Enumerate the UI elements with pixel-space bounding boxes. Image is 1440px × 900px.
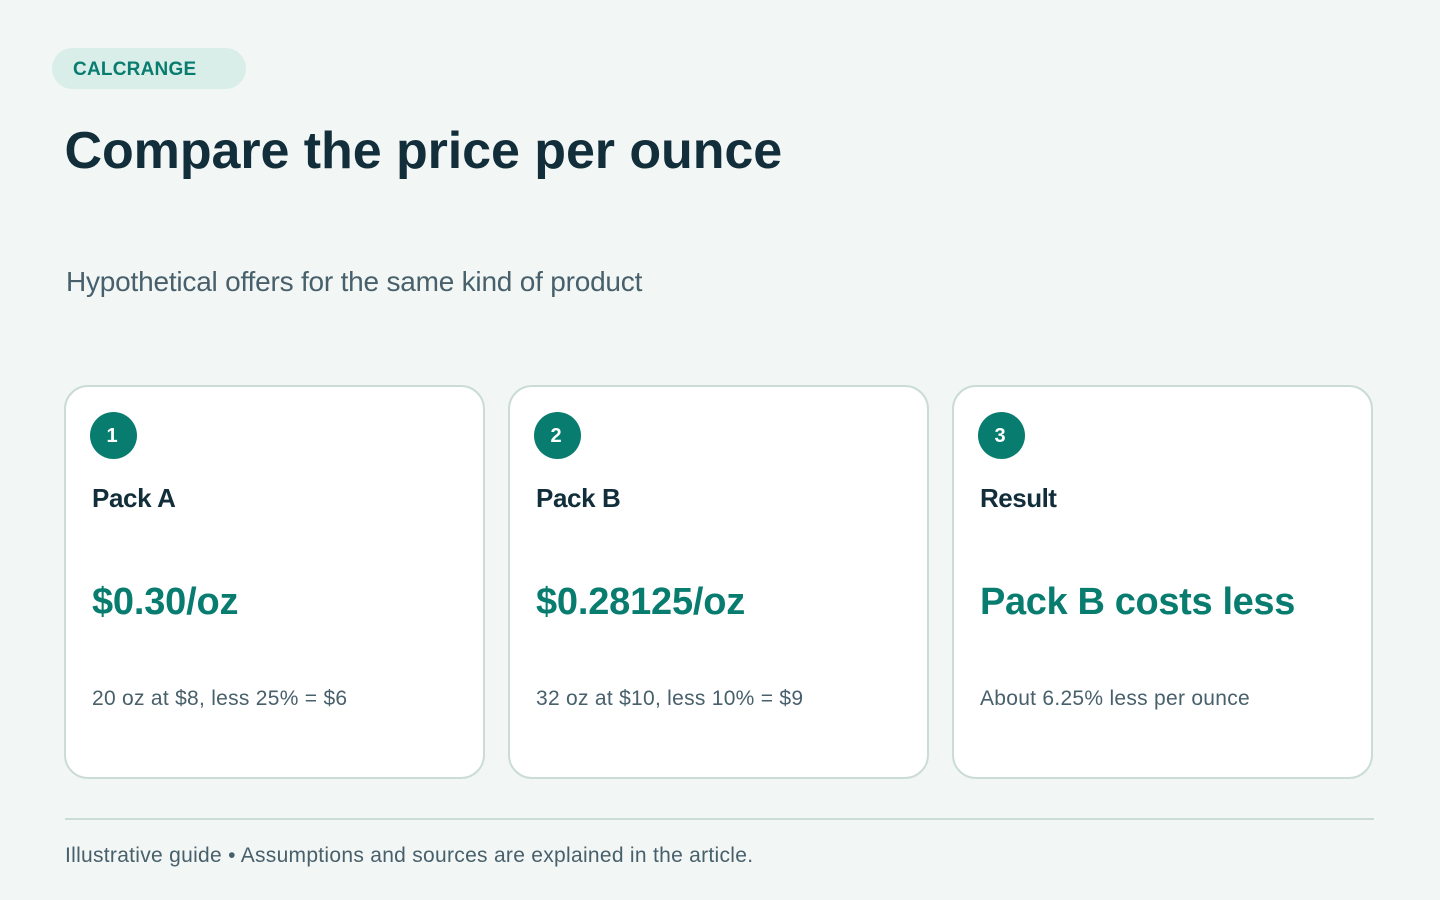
calculation: Pack B: 32 oz at $10, less 10% = $9 — [536, 687, 803, 710]
panel: Pack A — [64, 385, 485, 779]
step number 1: 1 — [106, 425, 118, 447]
result detail: About 6.25% less per ounce — [980, 687, 1250, 710]
badge label: CALCRANGE — [73, 59, 196, 80]
panel: Pack B — [508, 385, 929, 779]
step number 1 — [90, 412, 137, 459]
step number 3 — [978, 412, 1025, 459]
result statement: Pack B costs less — [980, 581, 1295, 623]
title: Compare the price per ounce — [64, 122, 782, 180]
subtitle: Hypothetical offers for the same kind of product — [66, 266, 642, 297]
step number 2: 2 — [550, 425, 562, 447]
step number 2 — [534, 412, 581, 459]
card heading: Result: Result — [980, 483, 1056, 513]
card heading: Pack B: Pack B — [536, 483, 620, 513]
price: Pack B: $0.28125/oz — [536, 581, 745, 623]
price: Pack A: $0.30/oz — [92, 581, 238, 623]
panel: Result — [952, 385, 1373, 779]
step number 3: 3 — [994, 425, 1006, 447]
footer note: Illustrative guide • Assumptions and sources are explained in the article. — [65, 844, 753, 867]
badge: CALCRANGE — [52, 48, 246, 89]
calculation: Pack A: 20 oz at $8, less 25% = $6 — [92, 687, 347, 710]
card heading: Pack A: Pack A — [92, 483, 175, 513]
